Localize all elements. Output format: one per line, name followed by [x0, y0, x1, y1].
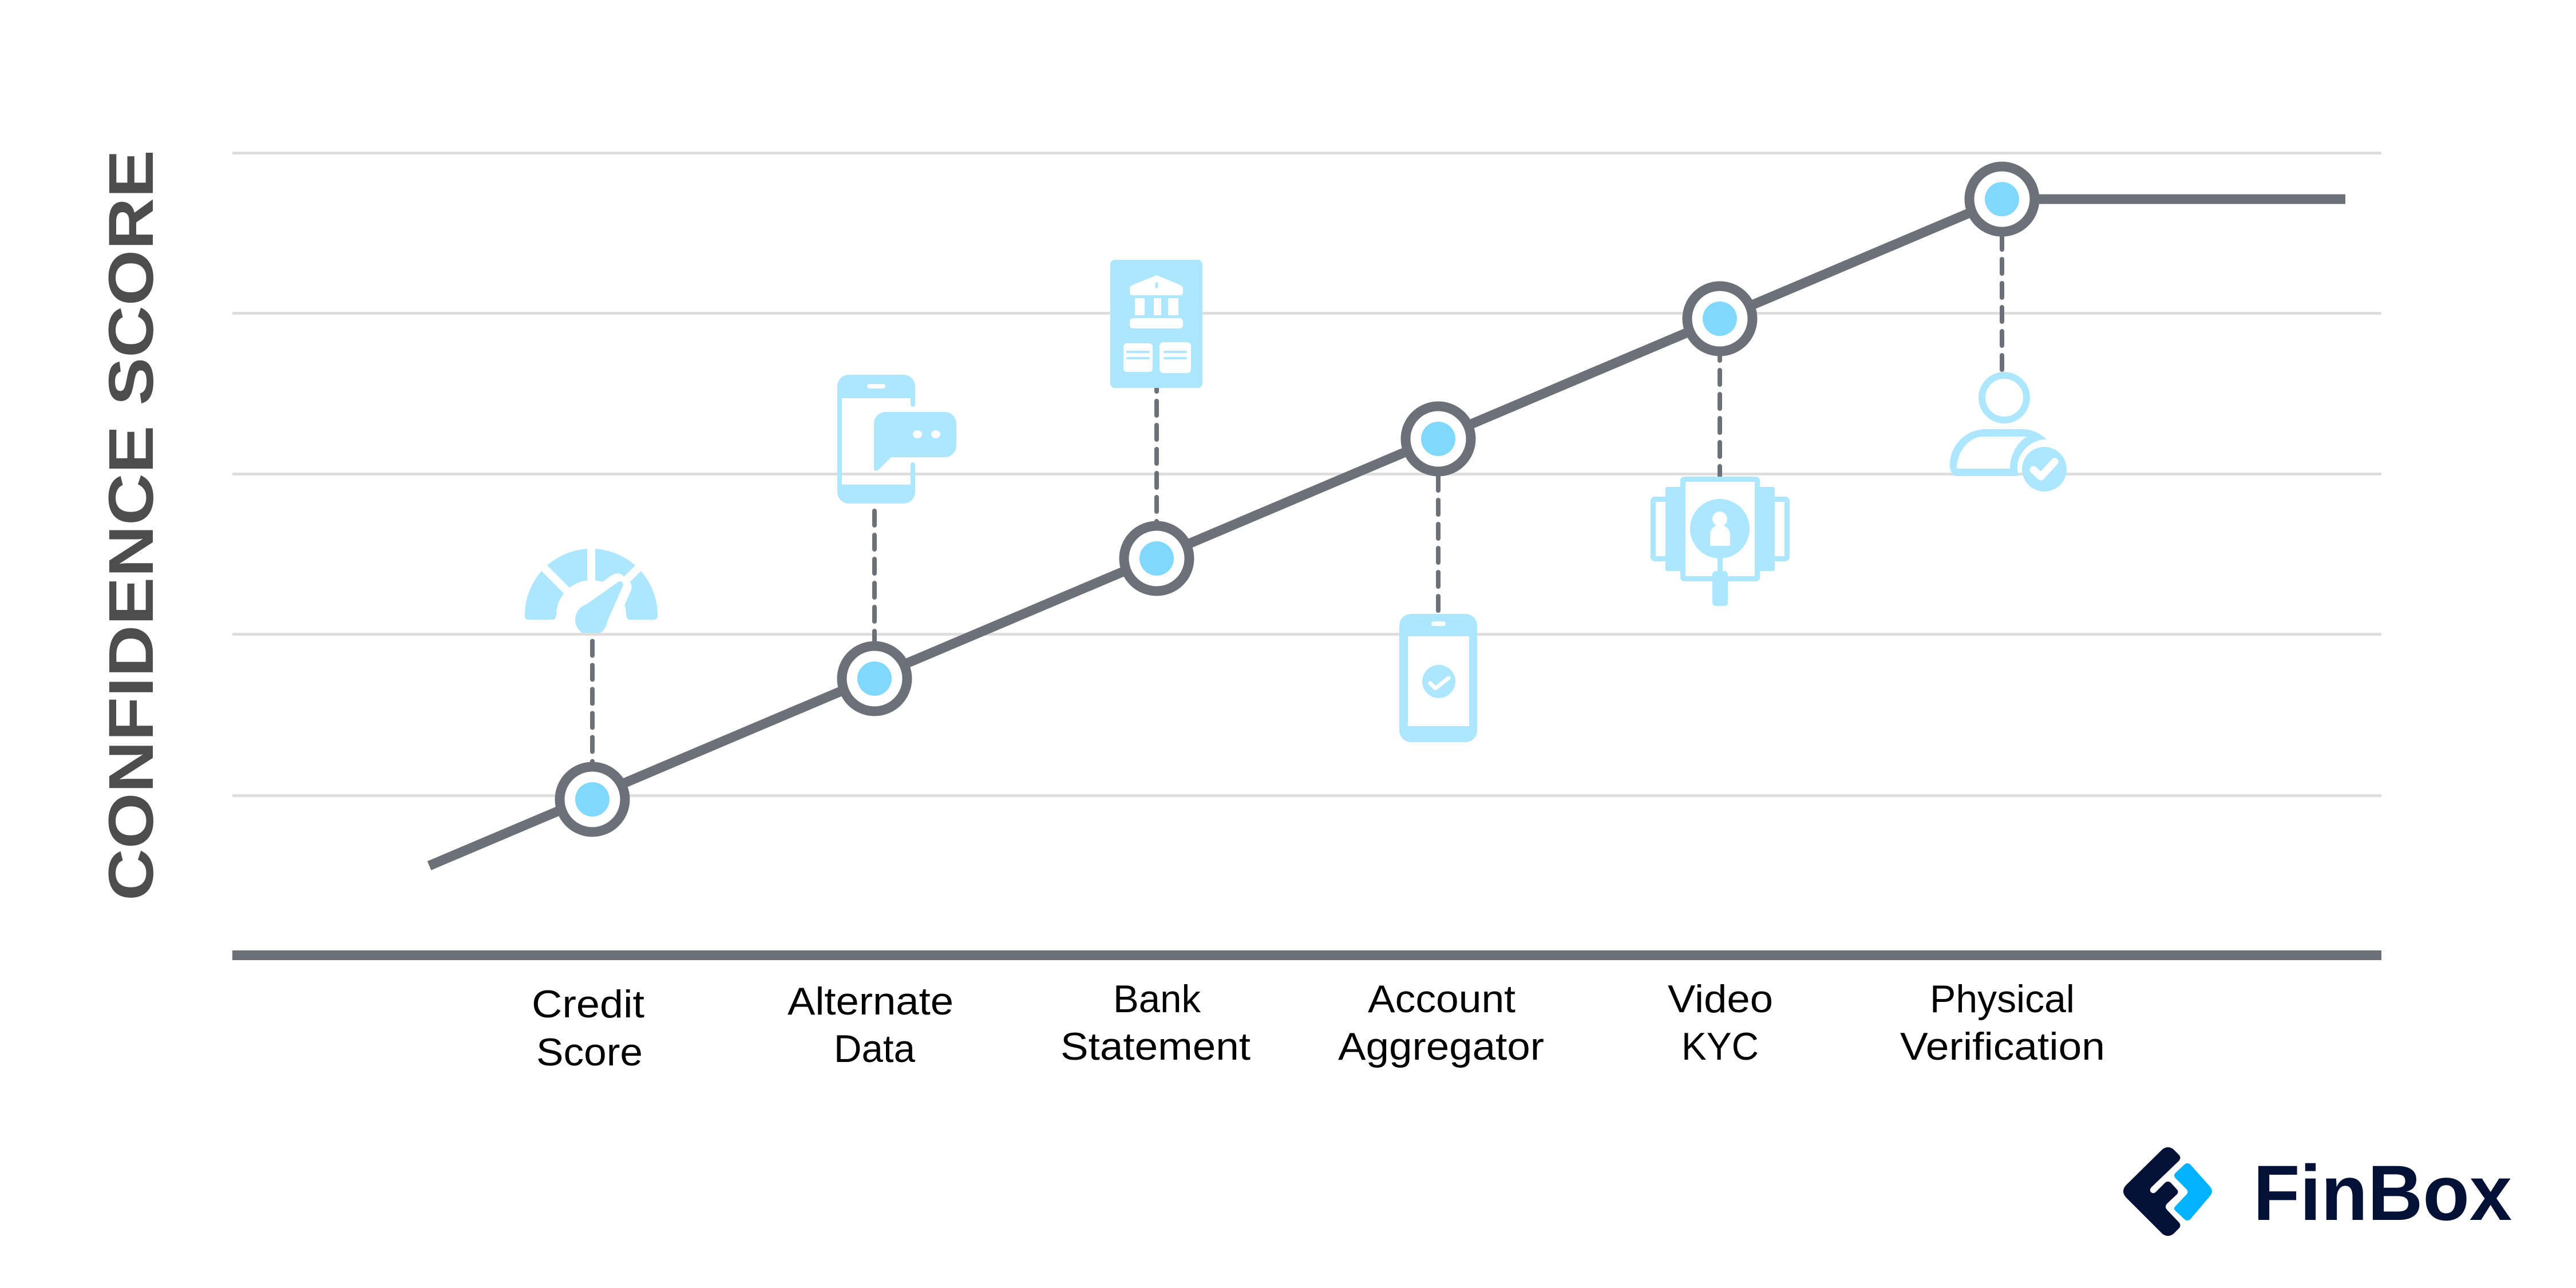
x axis [232, 950, 2381, 960]
node: video KYC [1687, 286, 1752, 351]
label: Alternate Data: Data [834, 1027, 915, 1071]
label: Account Aggregator: Account [1368, 977, 1515, 1021]
label: Video KYC: Video [1668, 977, 1773, 1021]
label: Bank Statement: Statement [1061, 1025, 1251, 1068]
label: Physical Verification: Verification [1900, 1025, 2105, 1068]
node: bank statement [1124, 526, 1189, 591]
label: Bank Statement [1061, 977, 1251, 1068]
label: Credit Score: Credit [532, 982, 644, 1026]
icon: credit score gauge [525, 544, 658, 636]
label: Alternate Data: Alternate [788, 980, 953, 1023]
label: Video KYC [1668, 977, 1773, 1068]
y axis title: CONFIDENCE SCORE [96, 150, 167, 901]
label: Physical Verification: Physical [1930, 977, 2075, 1021]
label: Alternate Data [788, 980, 953, 1071]
node: credit score [560, 767, 625, 832]
label: Account Aggregator: Aggregator [1338, 1025, 1544, 1068]
node: alternate data [842, 646, 907, 711]
icon: phone with check mark [1399, 614, 1477, 742]
label: Account Aggregator [1338, 977, 1544, 1068]
label: Credit Score: Score [536, 1031, 643, 1074]
logo: FinBox [2123, 1147, 2512, 1237]
label: Video KYC: KYC [1681, 1025, 1759, 1068]
icon: video KYC [1653, 479, 1787, 606]
label: Credit Score [532, 982, 644, 1074]
label: Physical Verification [1900, 977, 2105, 1068]
dashed connectors [592, 235, 2002, 767]
trend line [429, 199, 2345, 866]
node: account aggregator [1406, 406, 1471, 471]
icon: phone with chat bubble [837, 375, 956, 504]
icon: verified person [1950, 375, 2067, 492]
label: Bank Statement: Bank [1113, 977, 1201, 1021]
node: physical verification [1969, 167, 2035, 232]
icon: bank statement document [1110, 260, 1202, 388]
logo: FinBox: FinBox [2253, 1150, 2512, 1237]
